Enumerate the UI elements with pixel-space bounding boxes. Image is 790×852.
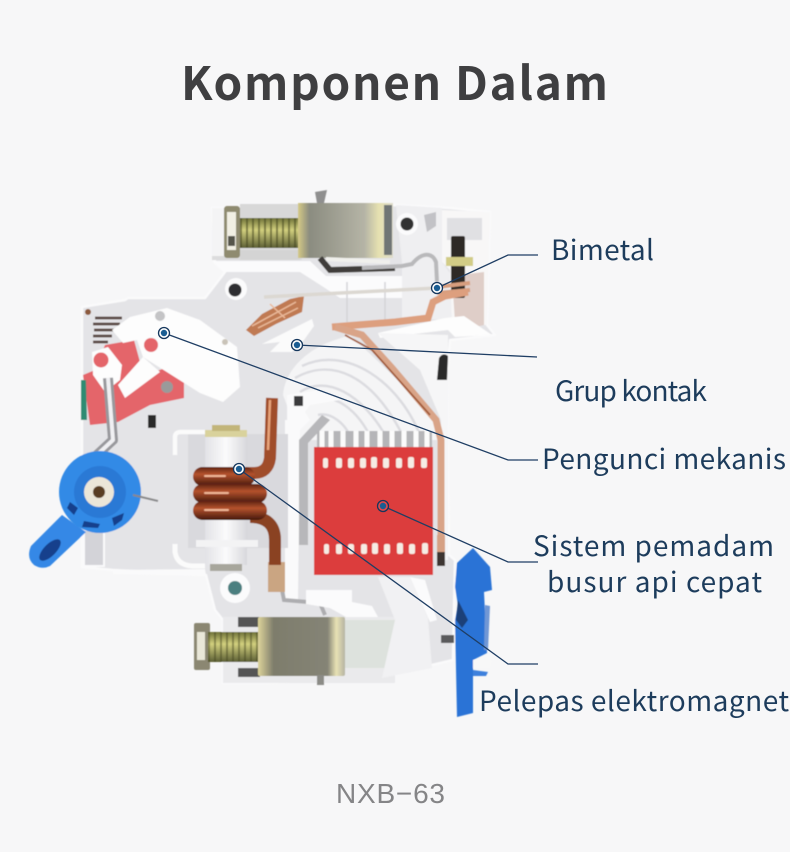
leader: mechanical lock: [158, 328, 538, 460]
black tab: [437, 354, 448, 380]
label: Pengunci mekanis: Pengunci mekanis: [542, 438, 786, 478]
top plate ledges: [212, 261, 402, 298]
label: Sistem pemadam busur api cepat: [533, 525, 774, 601]
white latch: [112, 308, 240, 402]
leader: contact group: [292, 340, 537, 357]
red arc extinguisher block: [314, 431, 433, 575]
top terminal: [212, 190, 437, 282]
coil compartment: [84, 432, 288, 576]
copper bar end: [437, 535, 445, 553]
bottom terminal: [194, 577, 454, 685]
left cavity: [84, 530, 104, 566]
latch details: [118, 311, 228, 398]
screw head: [224, 206, 240, 258]
fins: [317, 431, 432, 448]
label: Sistem pemadam busur api cepat: busur api cepat: [547, 561, 762, 601]
coil assembly: [193, 398, 275, 571]
blue handle: [29, 451, 158, 568]
leader: electromagnet: [234, 464, 538, 664]
contact piece: [262, 319, 314, 352]
red latch mechanism: [81, 318, 184, 428]
leader: arc extinguishing: [378, 500, 538, 562]
terminal bottom wire: [268, 562, 325, 615]
insulating cylinder: [205, 437, 247, 565]
spring: [93, 318, 122, 342]
label: Grup kontak: Grup kontak: [555, 370, 708, 410]
coil turns: [193, 467, 255, 486]
screw thread: [208, 632, 258, 662]
copper braid: [246, 296, 304, 336]
arc chute arcs: [283, 335, 440, 440]
inner ribs: [347, 282, 385, 322]
breaker device: [29, 190, 495, 717]
handle link with hook: [72, 347, 122, 478]
housing body: [82, 205, 495, 683]
label: Sistem pemadam busur api cepat: Sistem pemadam: [533, 525, 774, 565]
label: Bimetal: Bimetal: [551, 229, 654, 269]
screw head: [194, 623, 210, 670]
screw thread: [240, 218, 298, 248]
top strip wire: [320, 258, 395, 270]
blue DIN clip: [455, 548, 492, 717]
slots: [323, 457, 428, 554]
leader lines and markers: [158, 255, 538, 664]
label: Pelepas elektromagnet: Pelepas elektromagnet: [479, 680, 789, 720]
leader: bimetal: [432, 255, 538, 294]
model name: NXB−63: [336, 778, 445, 809]
bimetal strip and copper bar: [264, 283, 470, 560]
title: Komponen Dalam: [181, 48, 608, 114]
white inner bracket: [287, 390, 340, 600]
mounting holes: [85, 213, 420, 668]
white ledges: [306, 590, 378, 617]
copper tube upper: [240, 398, 272, 473]
clamp: [298, 203, 393, 258]
bimetal adjusting screw: [446, 236, 473, 298]
copper tube lower: [250, 517, 275, 565]
clamp: [258, 617, 345, 676]
